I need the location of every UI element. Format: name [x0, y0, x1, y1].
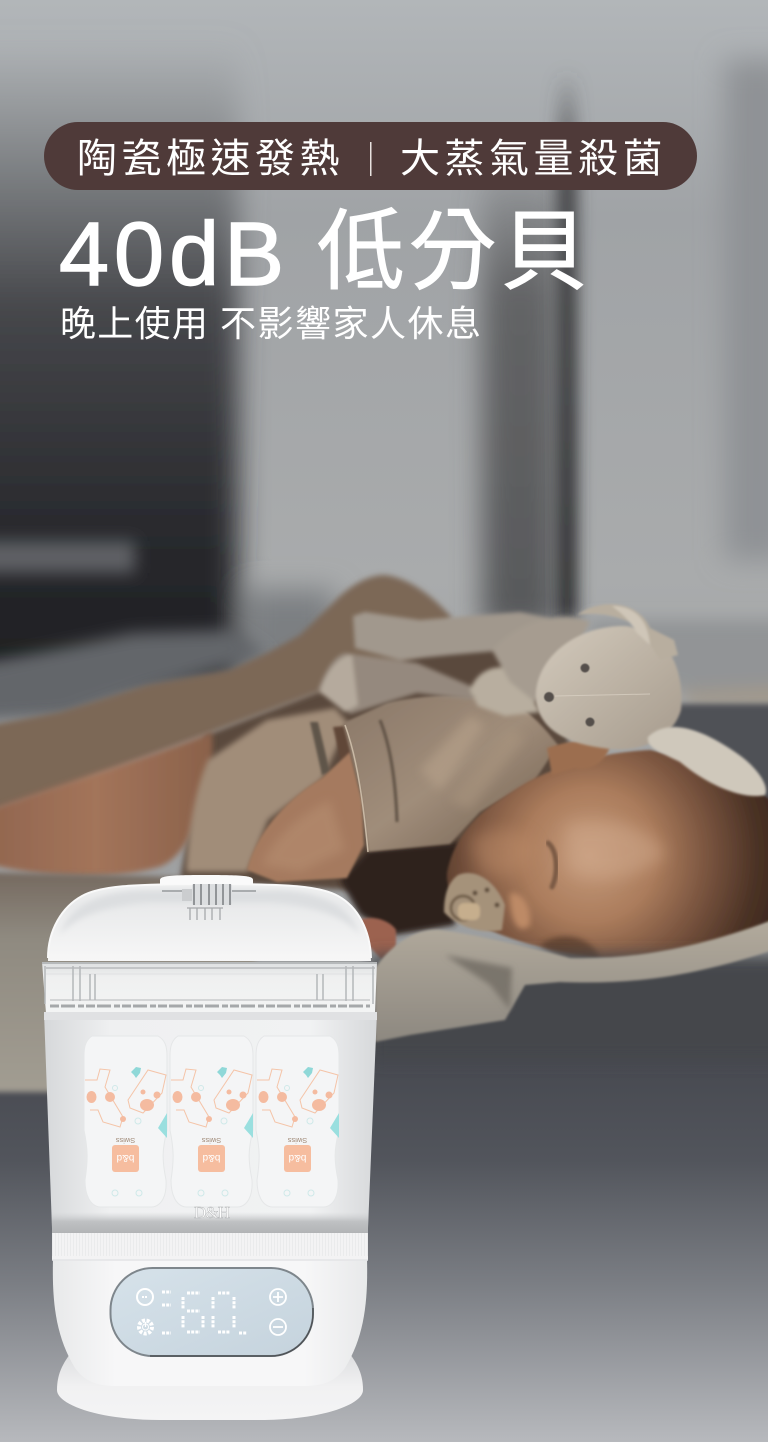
pacifier: [444, 873, 505, 931]
baby hand: [360, 918, 396, 960]
giraffe outlines: [257, 1069, 338, 1127]
lid latch: [162, 884, 256, 920]
main title chinese: 低分貝: [317, 202, 592, 301]
shirt stripe shadows: [310, 722, 353, 775]
pill text left: 陶瓷極速發熱: [77, 137, 344, 181]
bottle 3: [256, 1036, 339, 1207]
baby leg: [0, 732, 213, 876]
bunny seam: [555, 694, 650, 696]
plush bunny arms: [318, 612, 590, 716]
headline pill: [44, 122, 697, 190]
lid knob: [160, 875, 253, 884]
lid dome: [48, 883, 371, 961]
bottle 2: [170, 1036, 253, 1207]
lid rim highlight: [48, 884, 371, 958]
pill text right: 大蒸氣量殺菌: [400, 137, 667, 181]
pill divider: [370, 142, 372, 176]
bottle 2: b&d: [203, 1152, 220, 1163]
icon: mode: [137, 1289, 153, 1305]
subtitle: 晚上使用: [60, 303, 209, 344]
dark under-layer behind baby: [180, 625, 570, 890]
sheet left: [0, 872, 260, 1092]
bed sheets: [0, 872, 768, 1442]
base body: [53, 1258, 367, 1386]
plush bunny top ear: [577, 604, 678, 660]
shirt sleeve: [343, 695, 558, 852]
main title: 40dB: [59, 205, 289, 305]
LED digits: [162, 1292, 247, 1333]
sleeve trim and folds: [345, 715, 525, 852]
eye lashes: [548, 843, 556, 887]
brand mark: D&H: [194, 1203, 230, 1222]
bottle 3: b&d: [289, 1152, 306, 1163]
bottle 1 logo: [112, 1145, 139, 1172]
bottle 2 logo: [198, 1145, 225, 1172]
lid inner shadow: [60, 890, 360, 935]
bottle 3: Swiss: [287, 1136, 307, 1145]
display panel: [110, 1268, 313, 1356]
giraffe outlines: [85, 1069, 166, 1127]
baby shirt: [186, 708, 348, 872]
face highlights and shadows: [470, 821, 665, 959]
icon: plus: [270, 1289, 286, 1305]
sheet right highlight: [375, 914, 768, 1042]
frosted chamber: [44, 1012, 377, 1233]
bottle 1: [84, 1036, 167, 1207]
background photo: sleeping baby on bed: [0, 575, 768, 961]
arm highlight: [262, 800, 345, 872]
base plate: [57, 1354, 363, 1420]
bottle 2: Swiss: [201, 1136, 221, 1145]
bottle 1: b&d: [117, 1152, 134, 1163]
dark lower sheet shadow: [370, 955, 768, 1060]
icon: minus: [270, 1319, 286, 1335]
clear ring: [42, 962, 377, 1013]
plush bunny head: [536, 626, 682, 749]
sheet fold shadow: [445, 955, 512, 1010]
bunny eyes and nose: [544, 664, 594, 726]
baby ear: [547, 740, 610, 775]
bed back shadow: [665, 704, 768, 924]
giraffe outlines: [171, 1069, 252, 1127]
bottle 3 logo: [284, 1145, 311, 1172]
subtitle second part: 不影響家人休息: [220, 303, 483, 344]
sterilizer product: [42, 875, 377, 1420]
brown blanket: [0, 575, 452, 815]
plush bunny right ear: [648, 727, 766, 796]
dark shadow under baby: [340, 842, 460, 935]
icon: power gear: [139, 1320, 152, 1334]
baby head: [447, 750, 768, 961]
baby arm: [247, 752, 364, 882]
bottle 1: Swiss: [115, 1136, 135, 1145]
floor gradient: [0, 1040, 768, 1442]
collar ring: [52, 1227, 368, 1260]
